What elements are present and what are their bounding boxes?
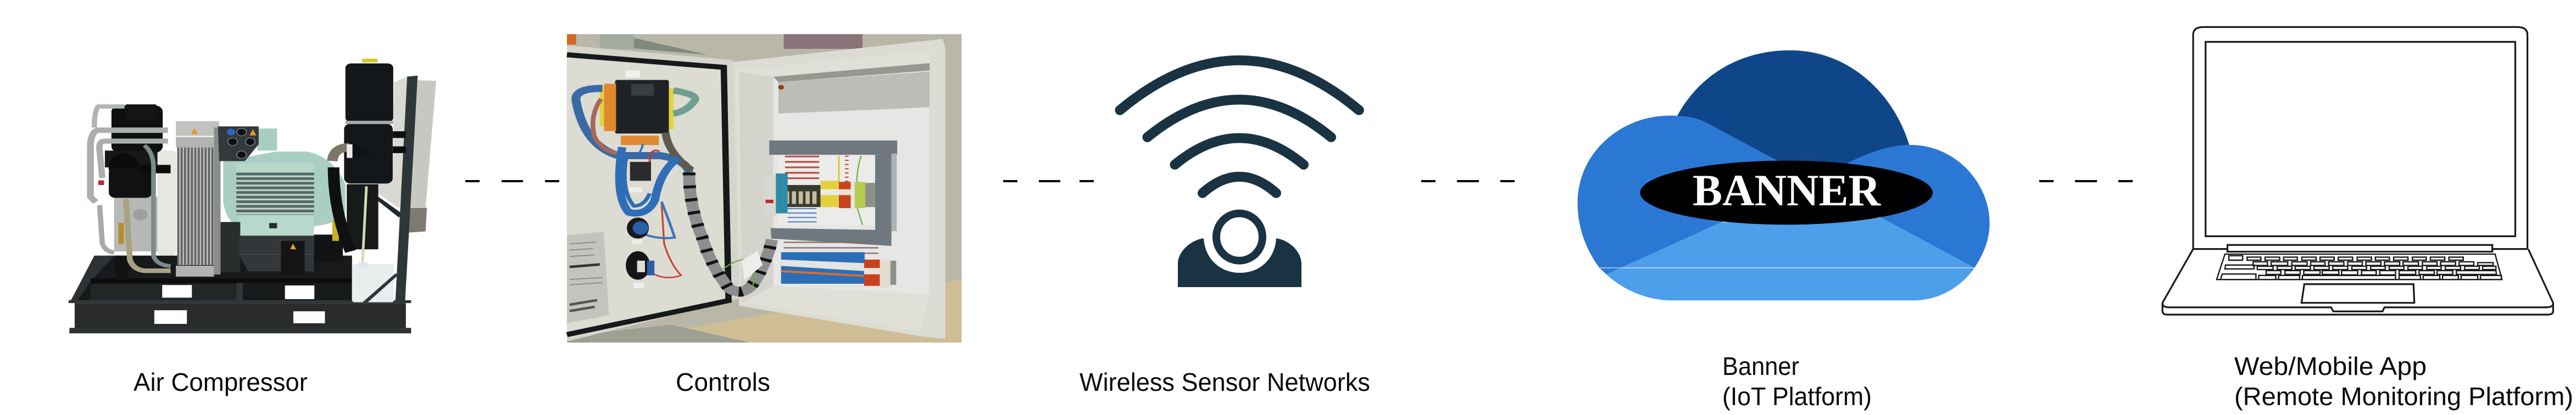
laptop trackpad — [2301, 284, 2414, 303]
connector dashes: compressor to controls — [465, 180, 559, 182]
cloud light bottom lobe — [1606, 218, 1974, 300]
electric motor — [218, 128, 346, 274]
laptop keyboard — [2217, 254, 2502, 279]
compressor head and pipework — [91, 104, 176, 280]
icon: Banner cloud — [1578, 51, 1990, 300]
coolant jug — [352, 262, 399, 302]
compressor base frame — [69, 256, 411, 333]
gauge panel — [218, 126, 259, 161]
cloud right lobe — [1812, 145, 1990, 268]
upper DIN rail assembly — [764, 155, 876, 225]
signal arcs — [1120, 60, 1359, 193]
label: web and mobile app: (Remote Monitoring Platform) — [2234, 382, 2573, 411]
logo wordmark: BANNER — [1693, 165, 1881, 215]
oil separator tank and hoses — [332, 59, 406, 263]
control cabinet illustration — [567, 34, 961, 343]
logo ellipse — [1640, 161, 1933, 225]
sensor base — [1178, 238, 1301, 287]
laptop screen — [2206, 42, 2515, 236]
air compressor illustration — [69, 59, 436, 333]
label: air compressor: Air Compressor — [133, 368, 308, 396]
icon: wireless sensor — [1120, 60, 1359, 287]
label: web and mobile app — [2234, 352, 2573, 411]
label: controls: Controls — [676, 368, 770, 396]
cloud left lobe — [1578, 116, 1840, 274]
sensor ring — [1216, 214, 1262, 261]
cabinet background — [567, 34, 961, 343]
laptop lid — [2193, 27, 2528, 249]
label: Banner IoT platform: (IoT Platform) — [1722, 382, 1872, 411]
connector dashes: cloud to app — [2039, 180, 2133, 182]
aftercooler radiator — [176, 121, 220, 277]
laptop base — [2162, 249, 2553, 315]
label: Banner IoT platform — [1722, 352, 1872, 411]
connector dashes: controls to wireless — [1003, 180, 1094, 182]
cabinet body — [732, 39, 945, 339]
door pilot devices — [626, 217, 654, 288]
lower terminal blocks — [781, 242, 896, 288]
label: web and mobile app: Web/Mobile App — [2234, 352, 2427, 380]
door sticker labels — [567, 70, 639, 323]
label: wireless sensor networks: Wireless Sensor Networks — [1080, 368, 1370, 396]
spiral wire loom — [689, 172, 772, 291]
icon: laptop — [2162, 27, 2553, 315]
open cabinet door — [567, 46, 739, 341]
control enclosure and support post — [357, 76, 436, 301]
connector dashes: wireless to cloud — [1421, 180, 1515, 182]
laptop hinge — [2193, 245, 2528, 251]
wiring duct — [769, 141, 897, 246]
door controller and wiring — [576, 80, 696, 278]
label: Banner IoT platform: Banner — [1722, 352, 1799, 380]
cloud dark top lobe — [1677, 51, 1924, 203]
